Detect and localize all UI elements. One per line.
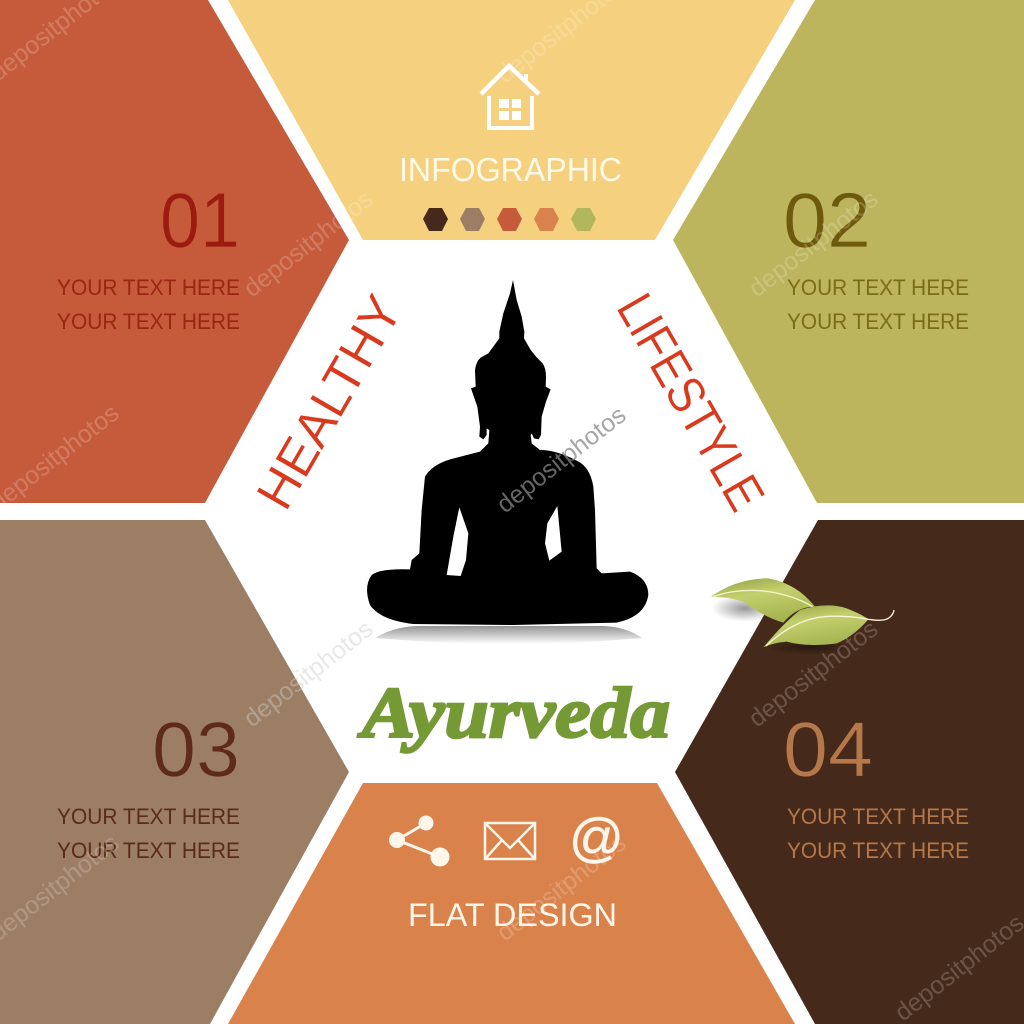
panel: top infographic — [228, 0, 795, 240]
text block 04 — [787, 804, 969, 863]
heading: infographic: INFOGRAPHIC — [399, 151, 622, 188]
heading: lifestyle: LIFESTYLE — [605, 284, 775, 521]
icon: at sign: @ — [569, 808, 624, 868]
heading: flat design: FLAT DESIGN — [408, 897, 617, 933]
watermarks: depositphotos — [743, 615, 883, 733]
text block 03 — [57, 804, 240, 863]
colour swatch hexagons — [423, 208, 596, 231]
text block 02: YOUR TEXT HERE — [787, 275, 969, 300]
title: ayurveda: Ayurveda — [358, 673, 670, 753]
watermarks: depositphotos — [238, 185, 378, 303]
panel: 02 olive — [673, 0, 1024, 503]
text block 01: YOUR TEXT HERE — [57, 309, 240, 334]
watermarks: depositphotos — [491, 829, 631, 947]
number 02: 02 — [783, 176, 871, 264]
watermarks: depositphotos — [238, 615, 378, 733]
panel: bottom flat design — [228, 783, 795, 1024]
panel: 04 dark brown — [675, 520, 1024, 1024]
text block 03: YOUR TEXT HERE — [57, 804, 240, 829]
number 04: 04 — [783, 705, 873, 793]
number 03: 03 — [152, 705, 240, 793]
text block 02: YOUR TEXT HERE — [787, 309, 969, 334]
panel: 01 red — [0, 0, 349, 503]
buddha reflection — [375, 626, 642, 644]
icon: buddha silhouette — [367, 280, 648, 625]
text block 01: YOUR TEXT HERE — [57, 275, 240, 300]
text block 04: YOUR TEXT HERE — [787, 838, 969, 863]
icon: house — [481, 66, 539, 128]
heading: healthy: HEALTHY — [246, 286, 414, 519]
icon: share — [389, 816, 450, 866]
text block 01 — [57, 275, 240, 334]
panel: 03 taupe — [0, 520, 349, 1024]
icon: envelope — [485, 823, 535, 859]
watermarks: depositphotos — [743, 185, 883, 303]
watermarks: depositphotos — [491, 401, 631, 519]
number 01: 01 — [160, 176, 240, 264]
icon: leaves — [711, 578, 894, 655]
text block 04: YOUR TEXT HERE — [787, 804, 969, 829]
text block 02 — [787, 275, 969, 334]
text block 03: YOUR TEXT HERE — [57, 838, 240, 863]
